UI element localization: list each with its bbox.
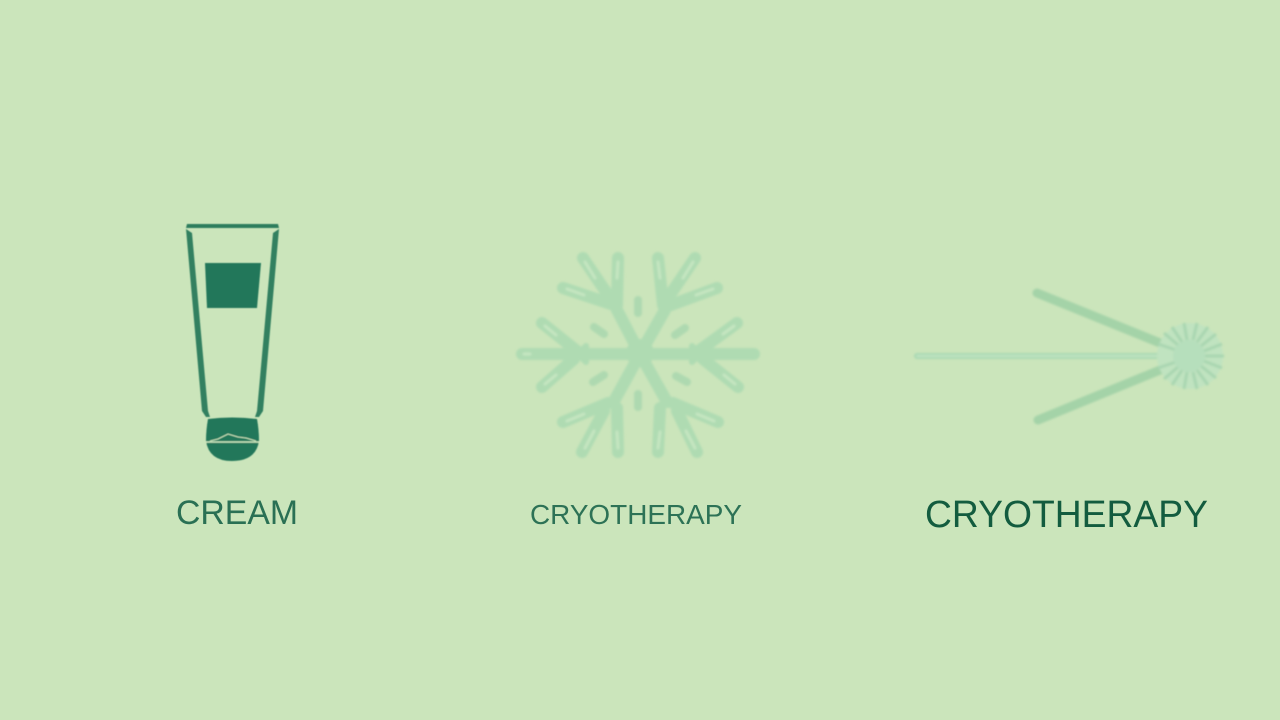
icon: snowflake <box>522 258 754 452</box>
snowflake inner crystals <box>593 300 687 407</box>
probe lower arm <box>1038 368 1165 420</box>
frost burst <box>1157 323 1224 389</box>
probe centre beam <box>917 353 1170 359</box>
probe upper arm <box>1037 293 1165 345</box>
icon: cryotherapy probe <box>917 293 1224 420</box>
icon: cream tube <box>186 224 279 461</box>
tube label <box>205 263 261 308</box>
tube cap <box>206 418 259 461</box>
label: cryotherapy centre: CRYOTHERAPY <box>530 499 742 530</box>
label: cryotherapy right: CRYOTHERAPY <box>925 494 1208 536</box>
label: cream: CREAM <box>176 494 298 532</box>
